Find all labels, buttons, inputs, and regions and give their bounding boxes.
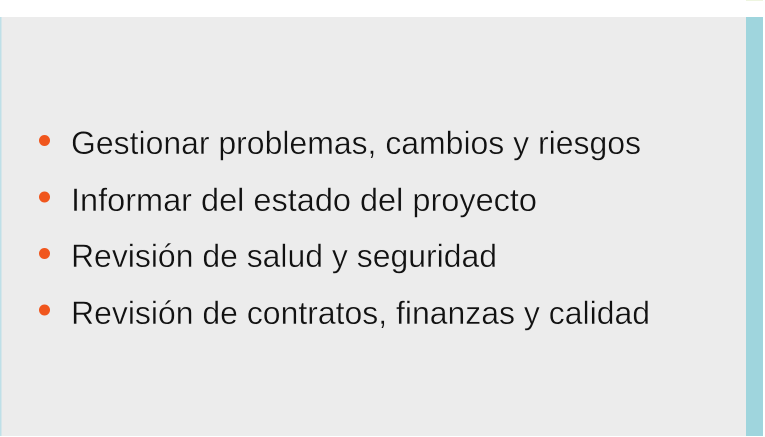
left edge stripe bbox=[0, 17, 2, 436]
list item: Revisión de salud: Revisión de salud y seguridad bbox=[71, 238, 497, 274]
bullet list bbox=[39, 125, 650, 331]
list item: Revisión de contratos: Revisión de contratos, finanzas y calidad bbox=[71, 295, 650, 331]
list item: Informar: Informar del estado del proyecto bbox=[71, 182, 537, 218]
list item: Gestionar: Gestionar problemas, cambios y riesgos bbox=[71, 125, 641, 161]
right teal bar bbox=[746, 17, 763, 436]
top accent sliver bbox=[746, 0, 763, 1]
